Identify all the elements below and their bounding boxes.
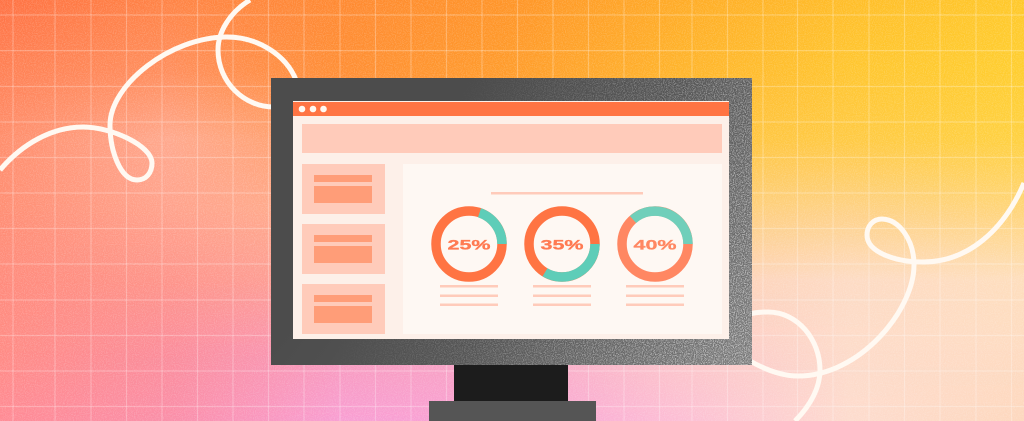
browser title bar [293,102,729,116]
panel heading line [491,192,643,194]
swirl line: top left [0,0,296,180]
donut chart: 25%: 25% [448,236,491,252]
caption lines 3 [626,285,684,306]
window dots [299,106,327,112]
main chart panel [403,164,722,334]
header banner [302,124,722,153]
sidebar card 1 [302,164,385,214]
screen [293,101,729,339]
donut chart: 35% [529,211,595,277]
swirl line: bottom right [750,183,1024,421]
donut chart: 40% [622,211,688,277]
caption lines 2 [533,285,591,306]
donut chart: 35%: 35% [540,236,584,252]
caption lines 1 [440,285,498,306]
sidebar card 2 [302,224,385,274]
monitor frame [271,78,752,365]
monitor stand neck [454,364,568,402]
sidebar card 3 [302,284,385,334]
monitor stand base [429,401,596,421]
donut chart: 25% [436,211,502,277]
donut chart: 40%: 40% [634,236,677,252]
